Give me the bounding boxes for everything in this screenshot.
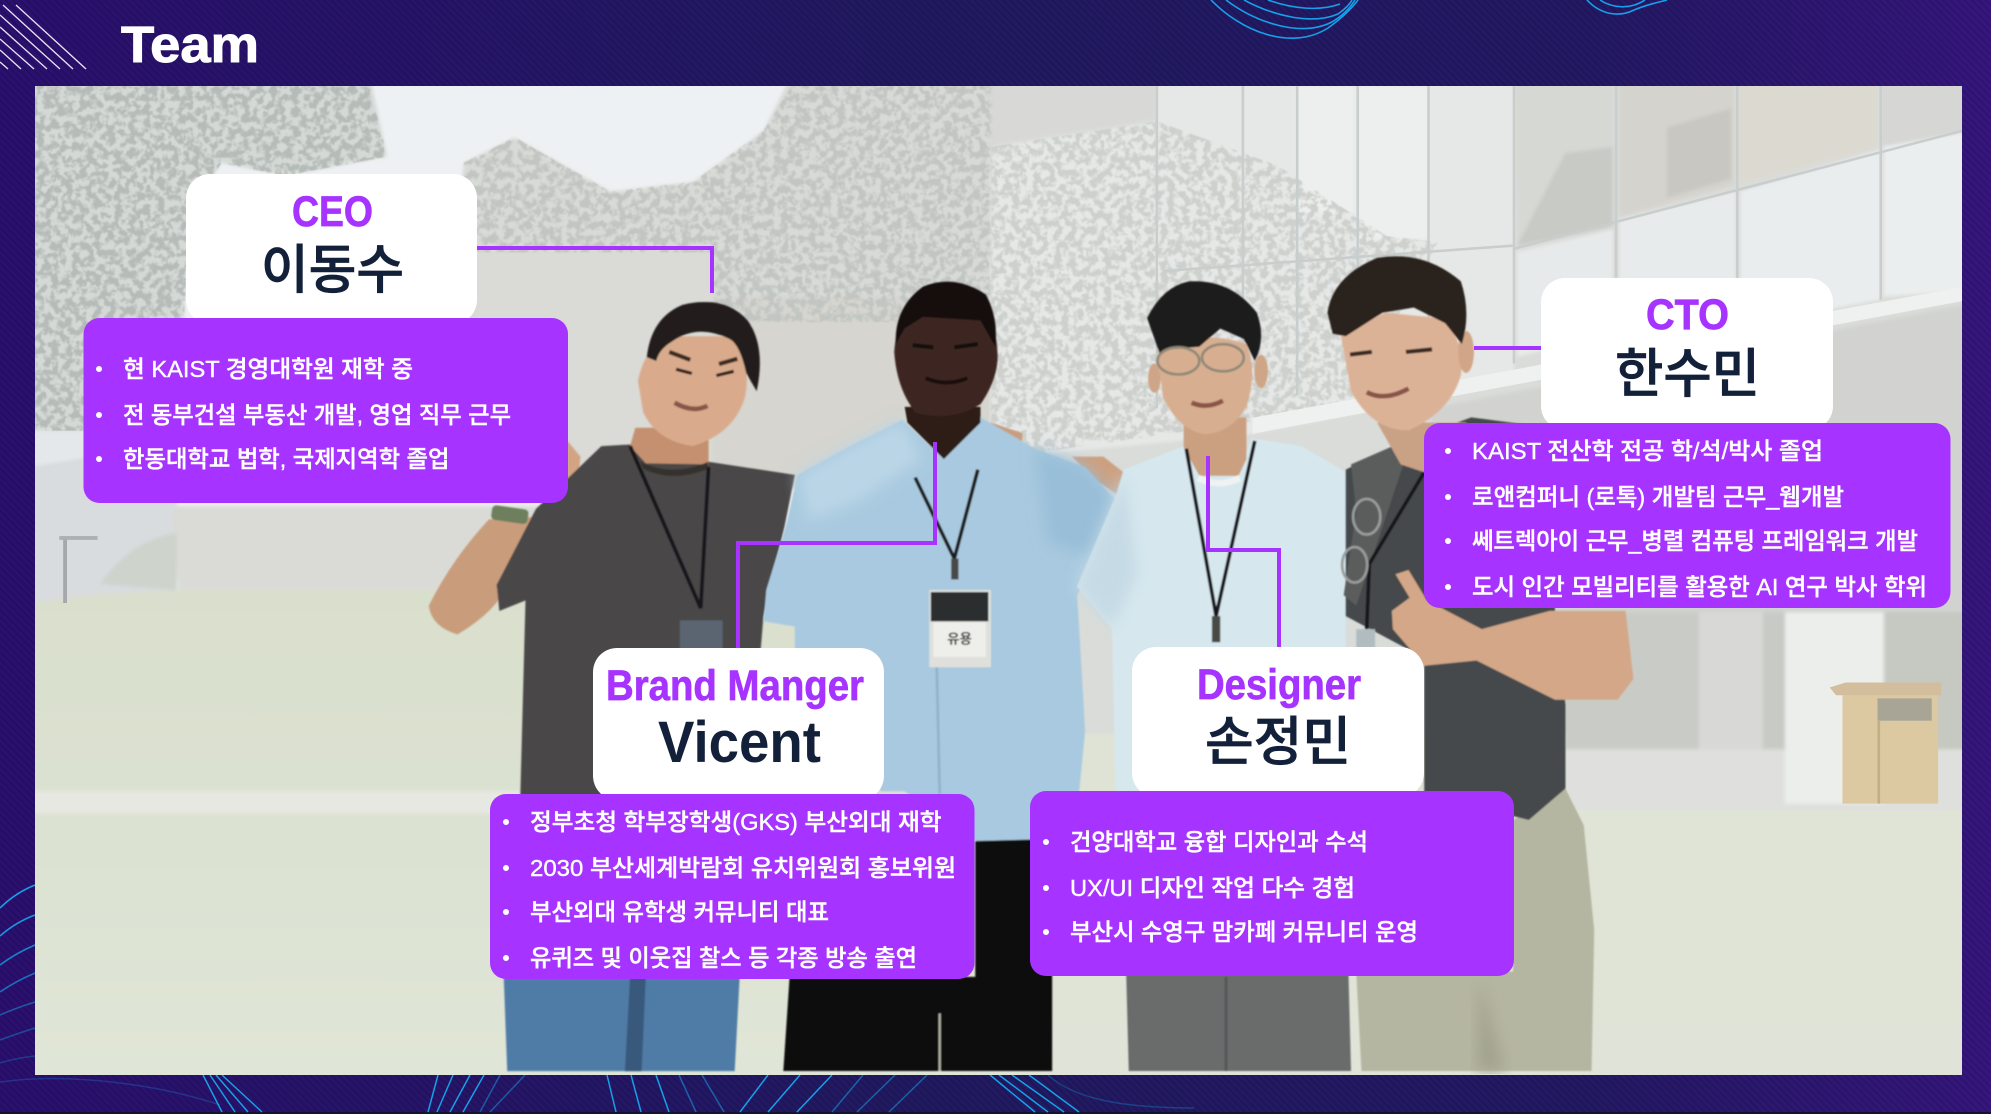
panel: Brand Manager career — [490, 794, 974, 979]
Designer item 2: UX/UI 디자인 작업 다수 경험 — [1070, 875, 1355, 901]
Brand Manager item 2: 2030 부산세계박람회 유치위원회 홍보위원 — [530, 855, 956, 881]
photo background: right — [990, 86, 1962, 805]
role: Brand Manger — [606, 662, 864, 710]
blue curves: top — [1211, 0, 1667, 38]
CTO item 3: 쎄트렉아이 근무_병렬 컴퓨팅 프레임워크 개발 — [1472, 528, 1918, 554]
name: 손정민 — [1205, 713, 1351, 772]
Brand Manager item 4: 유퀴즈 및 이웃집 찰스 등 각종 방송 출연 — [530, 945, 917, 971]
card: CEO — [186, 174, 477, 324]
role: Designer — [1197, 661, 1361, 709]
Designer item 3: 부산시 수영구 맘카페 커뮤니티 운영 — [1070, 919, 1418, 945]
blue lines: bottom — [0, 1075, 1194, 1112]
name: 한수민 — [1615, 345, 1760, 404]
card: Designer — [1132, 647, 1424, 797]
role: CTO — [1646, 291, 1729, 339]
CTO item 1: KAIST 전산학 전공 학/석/박사 졸업 — [1472, 438, 1823, 464]
CEO item 1: 현 KAIST 경영대학원 재학 중 — [123, 356, 413, 382]
connector: Designer — [1208, 456, 1279, 648]
connector: Brand Manager — [738, 442, 935, 648]
name: 이동수 — [261, 241, 404, 300]
photo background: left — [35, 86, 992, 811]
CTO item 4: 도시 인간 모빌리티를 활용한 AI 연구 박사 학위 — [1472, 574, 1927, 600]
panel: Designer career — [1030, 791, 1514, 976]
name: Vicent — [658, 710, 821, 775]
CEO item 3: 한동대학교 법학, 국제지역학 졸업 — [123, 446, 450, 472]
CTO item 2: 로앤컴퍼니 (로톡) 개발팀 근무_웹개발 — [1472, 484, 1844, 510]
person: Designer Son Jeong-min — [1077, 281, 1359, 1071]
panel: CEO career — [84, 318, 568, 503]
card: CTO — [1541, 278, 1833, 430]
Brand Manager item 3: 부산외대 유학생 커뮤니티 대표 — [530, 899, 829, 925]
CEO item 2: 전 동부건설 부동산 개발, 영업 직무 근무 — [123, 402, 511, 428]
connector: CEO — [477, 248, 712, 293]
person: Brand Manager Vincent — [763, 282, 1127, 1071]
person: Brand Manager Vincent: 유용 — [947, 631, 972, 646]
title: Team — [121, 16, 259, 73]
panel: CTO career — [1424, 423, 1950, 608]
role: CEO — [292, 188, 373, 236]
Designer item 1: 건양대학교 융합 디자인과 수석 — [1070, 829, 1368, 855]
Brand Manager item 1: 정부초청 학부장학생(GKS) 부산외대 재학 — [530, 809, 942, 835]
person: CEO Lee Dong-su — [429, 302, 795, 1071]
connector: CTO — [1474, 346, 1541, 350]
card: Brand Manager — [593, 648, 884, 800]
person: CTO Han Su-min — [1327, 256, 1633, 1071]
blue curves: left — [0, 885, 35, 1063]
decorative diagonal lines — [0, 5, 86, 69]
